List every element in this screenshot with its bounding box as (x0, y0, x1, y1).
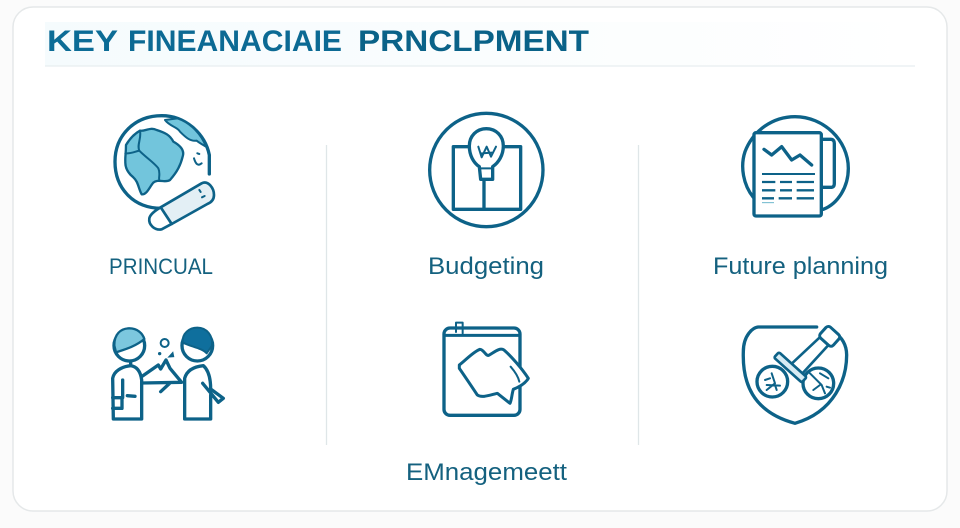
icon: shield with bicycle tool (743, 325, 847, 423)
icon: globe with usb stick (115, 116, 214, 230)
label: management: EMnagemeett (406, 459, 567, 486)
label: future planning: Future planning (713, 253, 888, 280)
title: FINEANACIAIE (128, 25, 342, 58)
title: PRNCLPMENT (358, 25, 589, 58)
icon: two people exchanging (113, 328, 223, 419)
icon: financial report (743, 117, 848, 216)
label: principal: PRINCUAL (109, 254, 213, 279)
title (47, 25, 589, 58)
title: KEY (47, 25, 118, 58)
icon: lightbulb over book (430, 113, 543, 227)
header band (45, 22, 915, 66)
left person (113, 328, 145, 419)
hands and pile (142, 360, 182, 392)
icon: notebook with note (444, 323, 528, 415)
right person (182, 328, 223, 419)
label: budgeting: Budgeting (428, 253, 544, 280)
